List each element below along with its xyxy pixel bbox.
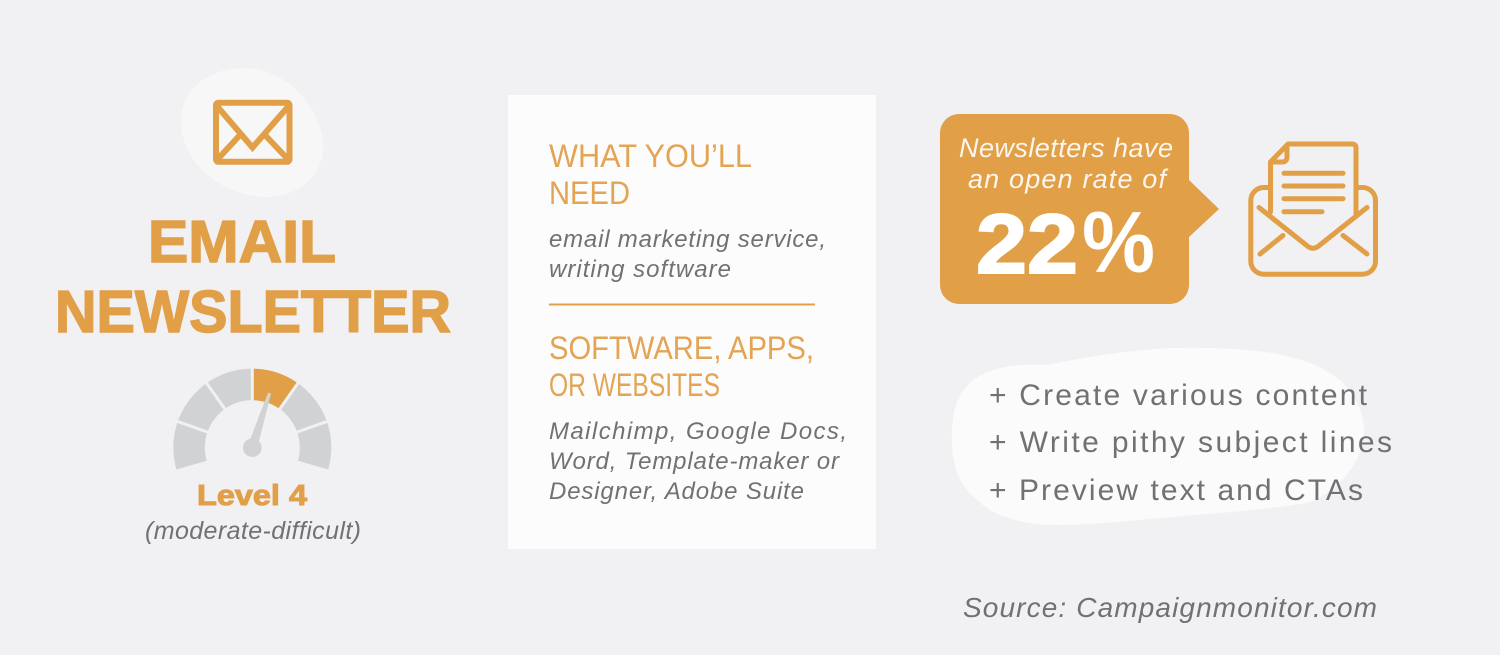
icon: mail in blob bbox=[181, 68, 323, 197]
heading: email newsletter: NEWSLETTER bbox=[55, 279, 451, 345]
text: required tools bbox=[549, 226, 826, 283]
label: level 4: (moderate-difficult) bbox=[145, 517, 361, 545]
heading: what you'll need bbox=[549, 138, 752, 211]
callout: open rate bbox=[940, 114, 1219, 304]
callout: open rate: 22 bbox=[976, 197, 1078, 291]
panel: what you'll need bbox=[508, 95, 876, 549]
heading: software, apps, or websites bbox=[549, 330, 814, 403]
text: required tools: email marketing service, bbox=[549, 226, 826, 253]
panel: left title column bbox=[55, 68, 451, 545]
callout: open rate: Newsletters have bbox=[959, 133, 1173, 163]
callout: open rate: % bbox=[1082, 195, 1155, 291]
panel: tips list blob: + Create various content bbox=[989, 379, 1368, 412]
panel: tips list blob: + Preview text and CTAs bbox=[989, 474, 1363, 507]
heading: software, apps, or websites: SOFTWARE, APPS, bbox=[549, 330, 814, 366]
text: software list bbox=[549, 418, 847, 505]
icon: open envelope with letter bbox=[1251, 144, 1376, 274]
heading: what you'll need: WHAT YOU’LL bbox=[549, 138, 752, 174]
panel: tips list blob bbox=[952, 348, 1392, 525]
heading: what you'll need: NEED bbox=[549, 175, 630, 211]
heading: email newsletter bbox=[55, 209, 451, 345]
callout: open rate: an open rate of bbox=[968, 164, 1168, 194]
text: software list: Designer, Adobe Suite bbox=[549, 478, 804, 505]
heading: email newsletter: EMAIL bbox=[148, 209, 336, 275]
text: software list: Mailchimp, Google Docs, bbox=[549, 418, 847, 445]
panel: tips list blob: + Write pithy subject lines bbox=[989, 426, 1392, 459]
label: level 4 bbox=[145, 480, 361, 545]
label: level 4: Level 4 bbox=[197, 480, 307, 512]
heading: software, apps, or websites: OR WEBSITES bbox=[549, 367, 720, 403]
text: source: Source: Campaignmonitor.com bbox=[963, 592, 1377, 623]
text: required tools: writing software bbox=[549, 256, 731, 283]
chart: difficulty gauge bbox=[172, 363, 332, 465]
text: software list: Word, Template-maker or bbox=[549, 448, 840, 475]
